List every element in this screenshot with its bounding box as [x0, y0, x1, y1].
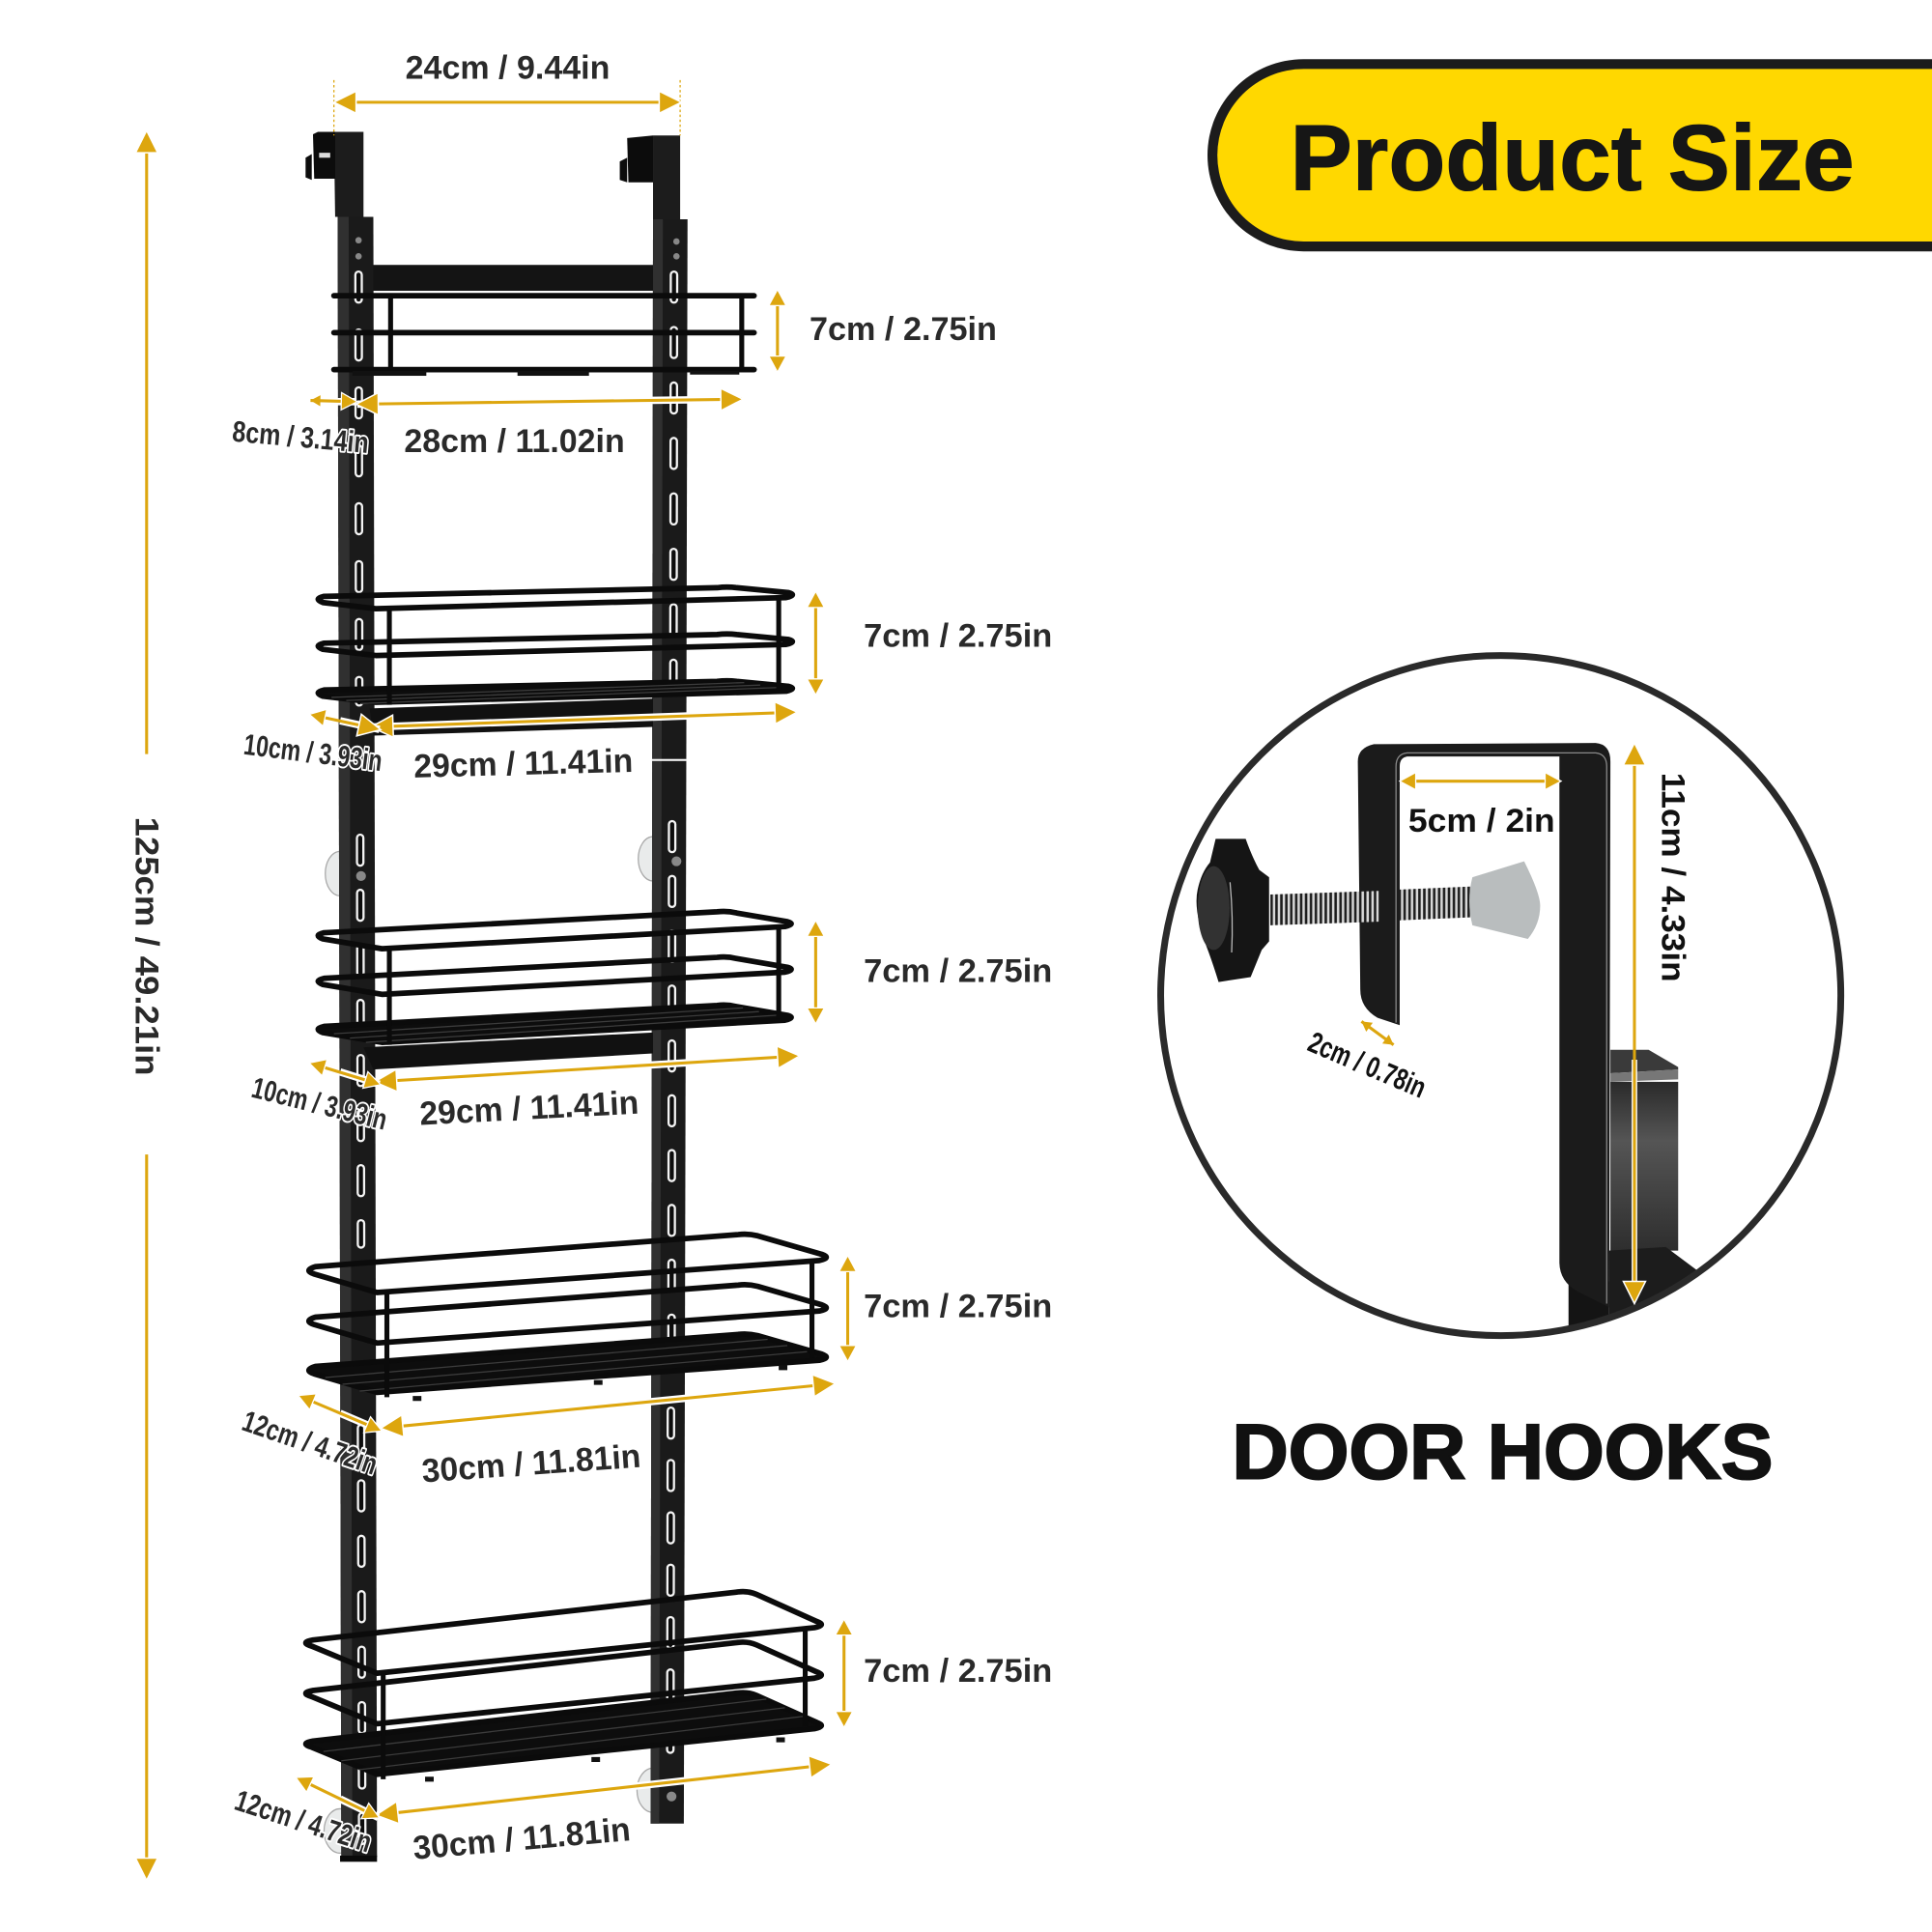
hook body	[1358, 743, 1610, 1307]
arrow: basket 1 height	[777, 291, 779, 371]
arrow: basket 5 width	[377, 1765, 831, 1815]
screw	[1270, 886, 1485, 925]
label: basket 4 depth: 12cm / 4.72in	[238, 1405, 382, 1482]
basket 4	[309, 1235, 826, 1401]
arrow: basket 4 width	[382, 1383, 835, 1428]
product: door rack rails	[305, 131, 688, 1861]
label: basket 5 width: 30cm / 11.81in	[412, 1811, 632, 1867]
label: basket 3 height: 7cm / 2.75in	[864, 953, 1052, 990]
arrow: basket 5 height	[843, 1620, 845, 1726]
label: overall width: 24cm / 9.44in	[406, 50, 610, 87]
arrow: basket 3 width	[376, 1056, 799, 1082]
basket 3	[318, 911, 791, 1069]
label: overall height: 125cm / 49.21in	[128, 817, 164, 1076]
label: basket 2 height: 7cm / 2.75in	[864, 618, 1052, 655]
arrow: basket 4 height	[846, 1257, 849, 1360]
label: basket 5 height: 7cm / 2.75in	[864, 1653, 1052, 1690]
arrow: basket 2 width	[372, 712, 796, 727]
label: hook arm width: 2cm / 0.78in	[1303, 1026, 1431, 1105]
rubber foot	[1469, 862, 1540, 939]
arrow: basket 4 depth	[299, 1396, 381, 1431]
hook lower parts	[1569, 1049, 1696, 1325]
arrow: basket 1 width	[357, 399, 742, 404]
hook highlight	[1396, 753, 1606, 1303]
arrow: overall width	[334, 80, 680, 135]
heading: door hooks: DOOR HOOKS	[1233, 1409, 1773, 1496]
arrow: hook arm width	[1361, 1021, 1394, 1045]
label: basket 1 height: 7cm / 2.75in	[810, 311, 997, 348]
label: basket 4 width: 30cm / 11.81in	[420, 1438, 642, 1490]
arrow: hook inner width	[1401, 780, 1560, 782]
clamp knob	[1197, 838, 1269, 982]
label: basket 5 depth: 12cm / 4.72in	[231, 1784, 376, 1859]
arrow: basket 5 depth	[297, 1778, 379, 1817]
circle outline	[1161, 656, 1841, 1336]
label: basket 3 depth: 10cm / 3.93in	[248, 1071, 390, 1137]
arrow: hook height	[1633, 744, 1636, 1302]
label: basket 1 depth: 8cm / 3.14in	[231, 415, 370, 460]
arrow: basket 3 height	[814, 922, 817, 1023]
suction cups	[324, 837, 669, 1853]
basket 2	[318, 587, 792, 735]
arrow: basket 2 depth	[310, 715, 380, 729]
arrow: basket 3 depth	[310, 1064, 380, 1084]
title banner: Product Size	[1290, 104, 1855, 210]
label: basket 2 width: 29cm / 11.41in	[413, 743, 634, 785]
label: basket 2 depth: 10cm / 3.93in	[242, 728, 384, 778]
label: basket 4 height: 7cm / 2.75in	[864, 1289, 1052, 1325]
label: basket 1 width: 28cm / 11.02in	[404, 423, 625, 460]
basket 1	[334, 296, 754, 376]
arrow: overall height	[146, 131, 148, 1879]
door hook detail circle	[1161, 656, 1841, 1343]
label: hook inner width: 5cm / 2in	[1408, 803, 1555, 839]
title banner	[1208, 59, 1932, 251]
arrow: basket 2 height	[814, 593, 817, 694]
label: hook height: 11cm / 4.33in	[1655, 773, 1691, 982]
label: basket 3 width: 29cm / 11.41in	[418, 1085, 639, 1133]
arrow: basket 1 depth	[310, 401, 356, 402]
basket 5	[306, 1592, 821, 1781]
